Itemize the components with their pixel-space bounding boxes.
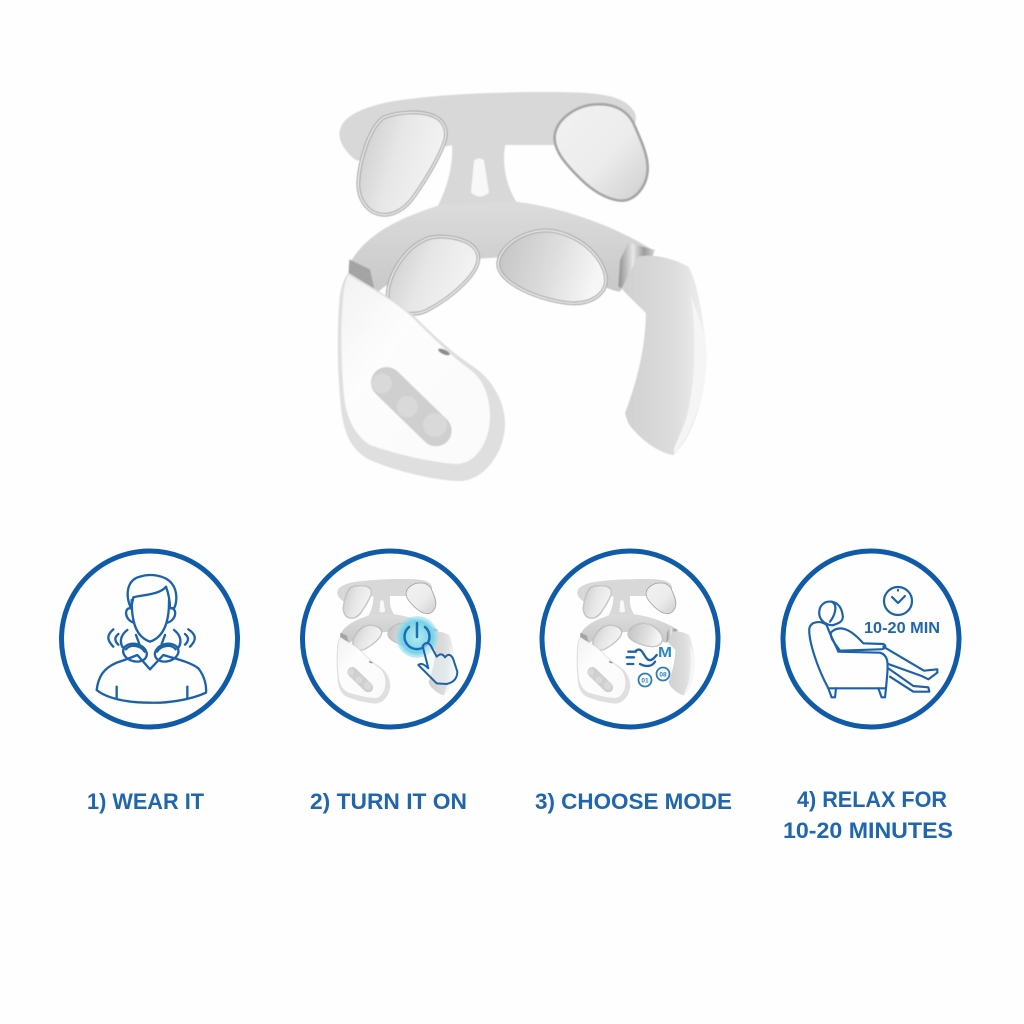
power symbol [404,623,430,649]
left body [338,273,505,481]
pad top right [555,104,648,201]
mode button left [638,674,652,686]
right body [622,256,707,455]
back bar [339,92,636,161]
clock icon [884,587,912,615]
button panel [387,383,436,431]
step 1 icon: wear it [62,551,238,727]
duration label: 10-20 MIN [864,620,940,637]
body highlight [341,275,490,464]
mode button right [656,668,670,680]
product photo: neck massager [338,92,707,481]
neck stem [435,140,518,212]
pad lower left [388,237,478,314]
line drawing: person wearing massager [97,575,206,703]
label: step 4 [783,787,953,843]
ring [542,551,718,727]
mini device [577,579,695,704]
step 4 icon: relax [783,551,959,727]
label: step 3: 3) CHOOSE MODE [535,789,732,814]
pad lower right [498,231,606,303]
line drawing: person in armchair [809,602,937,697]
pad top left [358,112,446,215]
side highlight [674,297,707,453]
step 2 icon: turn it on [302,551,478,727]
mode button left: 01 [641,678,649,684]
stem slot [471,158,489,197]
buttons [372,373,392,393]
pointing hand [418,643,457,684]
indicator light [437,347,451,357]
ring [302,551,478,727]
wave symbols [627,650,657,666]
left metal hinge [348,259,375,292]
ring [62,551,238,727]
step 3 icon: choose mode [542,551,718,727]
label: step 4: 4) RELAX FOR [797,787,947,812]
body shell [622,256,707,455]
body shell [338,273,505,481]
power button glow [396,616,438,658]
label: step 2: 2) TURN IT ON [310,789,467,814]
ring [783,551,959,727]
mini device [337,579,455,704]
mode button right: 08 [659,672,667,678]
front band [348,202,650,293]
mode letter: M [658,644,672,661]
label: step 4: 10-20 MINUTES [783,818,953,843]
label: step 1: 1) WEAR IT [87,789,204,814]
right metal hinge [618,243,655,292]
